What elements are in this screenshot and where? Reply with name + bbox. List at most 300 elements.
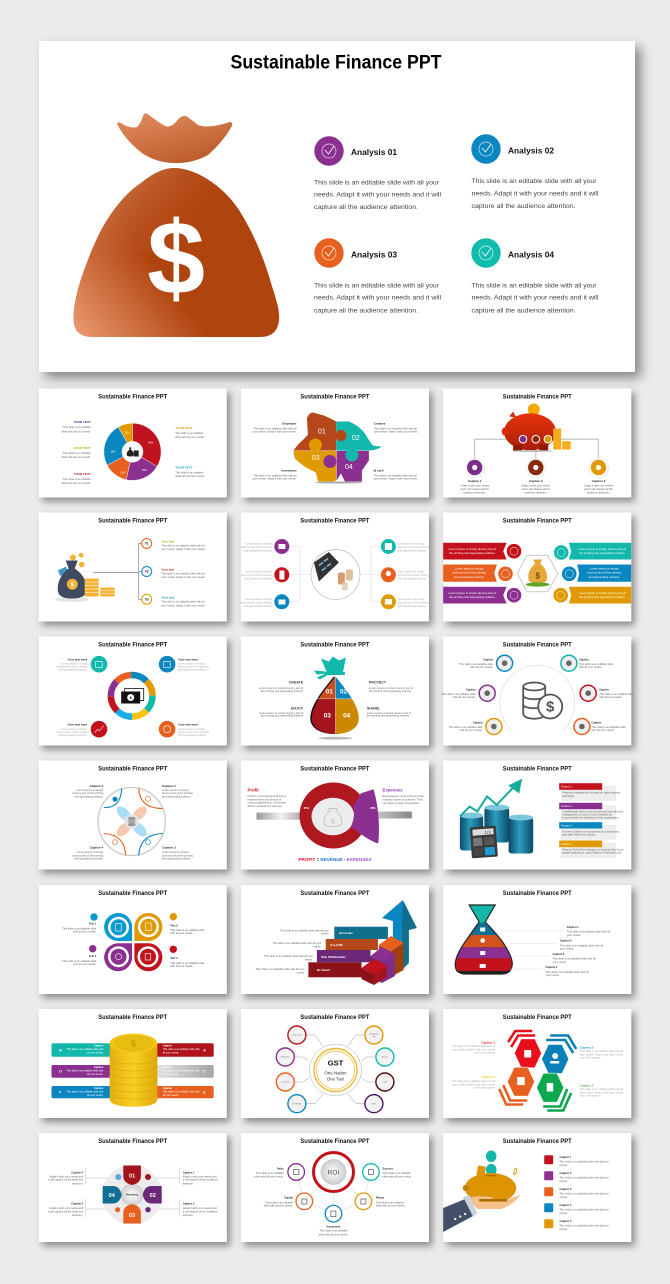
profit text [248, 788, 287, 808]
right banners: all your needs. [163, 1094, 179, 1097]
ring chart: 45% [304, 806, 310, 810]
text blocks: slide with all your needs. [376, 1204, 405, 1208]
left banners: all your needs. [87, 1052, 104, 1054]
caption text: This slide is an editable slide with all [452, 1079, 495, 1083]
left banners: This slide is an editable slide with [66, 1048, 104, 1051]
text blocks: This slide is an editable slide [579, 662, 614, 666]
captions: Caption 2 [183, 1202, 195, 1206]
profit text: Profit [247, 788, 259, 792]
finance cards: Finance 4 [561, 843, 572, 846]
satellite circles: CST [383, 1082, 388, 1084]
icon: coins [486, 1150, 496, 1176]
step bars [308, 927, 388, 977]
item 02: Your text [161, 568, 174, 572]
text blocks: Caption 2 [162, 784, 176, 788]
right text: Lorem Ipsum is simply [398, 570, 425, 574]
satellite circles [276, 1026, 394, 1113]
finance cards: It's been confined to incorporate by a secondary [562, 830, 620, 834]
item 01: 01 [145, 542, 149, 546]
finance cards: to accomplish the objectives of the organization. [562, 816, 620, 820]
step bars: Use ATM [330, 943, 343, 947]
text blocks: slide with all your needs. [61, 481, 91, 485]
item 02: This slide is an editable slide with all [161, 572, 205, 576]
icon: red pig [502, 404, 571, 452]
caption text: Caption 3 [580, 1083, 594, 1087]
captions: it will capture all the audience [183, 1178, 218, 1182]
text blocks: slide with all your needs. [175, 435, 205, 439]
captions: it will capture all the audience [48, 1178, 84, 1182]
text blocks: Caption 4 [90, 846, 104, 850]
banner text: dummy text of the printing [453, 571, 486, 575]
text blocks: Caption 3 [162, 846, 176, 850]
finance cards: growth projections, stock balance, Profit and Loss. [562, 850, 622, 854]
chart: cylinders [460, 804, 533, 854]
analysis 03 [314, 238, 441, 314]
analysis 01: needs. Adapt it with your needs and it will [314, 192, 441, 199]
central photo [311, 550, 360, 600]
icon: navy bag and coins [55, 553, 115, 602]
left text: needs. [313, 944, 322, 948]
caption text: your needs. Adapt it with your needs [580, 1052, 624, 1056]
analysis 01 [314, 136, 441, 211]
captions: CREATE [289, 680, 304, 684]
text blocks: Caption [483, 658, 493, 662]
right text: and typesetting industry [398, 548, 427, 552]
profit text: activity exceeds the expense. [247, 804, 283, 808]
caption 3: Adapt it with your needs [584, 484, 613, 488]
banner icons [498, 543, 577, 603]
item 03: your needs. Adapt it with your needs. [161, 604, 206, 608]
text blocks: Return [376, 1196, 385, 1200]
outer icons [479, 655, 596, 734]
main slide card [39, 41, 635, 372]
item 01: Your text [161, 540, 174, 544]
panel: slide 13 four teardrops [39, 885, 227, 994]
text blocks: Caption [579, 658, 589, 662]
centre hexagon bag [517, 555, 558, 592]
text blocks: slide with all your needs. [264, 1204, 293, 1208]
heading: Sustainable Finance PPT [503, 891, 572, 897]
panel: slide 3 red piggy bank [443, 388, 631, 498]
text blocks: dummy text of the printing [162, 854, 193, 858]
right text: dummy text of the printing [398, 545, 429, 549]
text blocks: slide with all your needs. [61, 430, 91, 434]
captions [259, 680, 414, 718]
analysis 04 [471, 238, 598, 314]
caption text: Caption 1 [481, 1040, 495, 1044]
caption text: your needs. Adapt it with your needs [452, 1047, 496, 1051]
panel: slide 9 coins and arc [441, 636, 634, 746]
captions: your needs. [553, 960, 567, 964]
caption 3: audience attention. [587, 490, 610, 494]
heading: Sustainable Finance PPT [98, 767, 168, 773]
left text: and typesetting industry [244, 548, 273, 552]
left banners: F [59, 1090, 62, 1094]
gray bars [256, 812, 412, 820]
captions [546, 925, 610, 977]
icon: quadrant bag: 04 [343, 712, 351, 720]
finance cards: management of cash in such a fashion as [562, 812, 612, 816]
left banners: Caption [94, 1066, 104, 1069]
text blocks: dummy text of the printing [56, 664, 88, 668]
captions: ENJOY [291, 706, 304, 710]
left banners: all your needs. [87, 1094, 104, 1097]
captions: your needs. Adapt it with your needs. [374, 476, 418, 480]
banner text: dummy text of the printing [588, 571, 621, 575]
caption 3 [584, 458, 613, 494]
text blocks: This slide is an editable [175, 470, 204, 474]
list items: This slide is an editable slide with all your [560, 1160, 609, 1164]
banner text: Lorem Ipsum is simply dummy text of [448, 547, 496, 551]
expenses text: Expenses [382, 788, 403, 792]
caption 1: and it will capture all the [460, 487, 490, 491]
banner text [448, 547, 626, 599]
profit text: realized when the amount of [247, 798, 282, 802]
captions: Adapt it with your needs and [49, 1206, 84, 1210]
list items: needs. [560, 1227, 568, 1231]
captions: PROTECT [369, 680, 387, 684]
connector lines [295, 1035, 375, 1104]
ring chart [108, 672, 156, 720]
connector lines [296, 1172, 371, 1214]
captions: Caption 1 [567, 925, 579, 929]
text blocks: slide with all your needs. [382, 1174, 412, 1178]
caption text: your needs. Adapt it with your needs [580, 1090, 624, 1094]
captions: This slide is an editable slide with all [374, 474, 417, 478]
donut chart: 30% [110, 450, 116, 454]
puzzle pig [293, 412, 382, 482]
finance cards [559, 783, 624, 858]
banner text: Lorem Ipsum is simply dummy text of [448, 591, 496, 595]
formula: PROFIT = REVENUE - EXPENSES [298, 857, 372, 862]
text blocks: and typesetting industry. [178, 668, 207, 672]
text blocks: with all your needs. [73, 962, 97, 966]
caption 1: audience attention. [463, 490, 486, 494]
captions: your needs. [567, 933, 581, 937]
wheel: 01 [129, 1174, 135, 1180]
text blocks: Sales [277, 1166, 284, 1170]
panel: slide 5 calculator hub [241, 512, 429, 622]
caption 3: and it will capture all the [584, 487, 613, 491]
ring chart: 35% [370, 806, 376, 810]
panel: slide 4 money bag and list [39, 512, 227, 622]
left text: needs. [305, 957, 313, 961]
text blocks: slide with all your needs. [254, 1174, 284, 1178]
panel: slide 20 ROI hub [241, 1133, 429, 1242]
right banners: Caption [163, 1044, 172, 1048]
panel: slide 18 hexagons [443, 1009, 631, 1118]
text blocks: with all your needs. [470, 665, 493, 669]
text blocks [61, 420, 205, 485]
heading: Sustainable Finance PPT [503, 1139, 572, 1145]
expenses text: ordinary course of business. They [382, 798, 423, 802]
left icons [274, 539, 289, 609]
captions: the printing and typesetting industry [261, 689, 304, 693]
left banners [52, 1043, 112, 1098]
captions: Caption 3 [553, 952, 565, 956]
connector lines [99, 664, 167, 729]
text blocks: This slide is an editable slide [170, 928, 205, 932]
puzzle numbers: 03 [312, 455, 320, 462]
main title: Sustainable Finance PPT [230, 52, 442, 74]
arc [500, 665, 575, 731]
text blocks: This slide is an editable [175, 431, 204, 435]
centre hexagon bag: $ [535, 572, 540, 580]
analysis 03: capture all the audience attention. [314, 307, 418, 314]
icon: quadrant bag: 02 [340, 688, 348, 696]
arrow [460, 779, 522, 816]
left text: needs. [297, 970, 305, 974]
left text: dummy text of the printing [241, 600, 272, 604]
captions: it will capture all the audience [183, 1209, 218, 1213]
coin stack [110, 1034, 157, 1107]
text blocks: This slide is an editable [63, 451, 91, 455]
text blocks: with all your needs. [459, 728, 483, 732]
step bars: Be Smart [317, 968, 330, 972]
banner text: the printing and typesetting industry. [449, 595, 496, 599]
caption text [452, 1040, 624, 1097]
right banners: all your needs. [163, 1073, 179, 1076]
finance cards: specialist within the venture. [562, 832, 596, 836]
text blocks: Caption [473, 720, 483, 724]
panel: slide 17 GST hub [241, 1009, 429, 1118]
item 01: your needs. Adapt it with your needs. [161, 547, 206, 551]
left text: This slide is an editable slide with all your [272, 941, 321, 945]
list items: needs. [560, 1195, 568, 1199]
puzzle numbers: 04 [345, 464, 353, 471]
panel: slide 10 circular flower [39, 760, 227, 870]
text blocks: Caption [466, 688, 476, 692]
wheel [102, 1165, 162, 1224]
captions: Caption 4 [71, 1170, 84, 1174]
satellite circles: Tax [372, 1036, 375, 1038]
text blocks: dummy text of the printing [178, 730, 209, 734]
ROI circle [314, 1152, 354, 1192]
finance cards: It additionally refers to the economical and effective [562, 810, 624, 814]
panel: slide 19 heading wheel [39, 1133, 227, 1242]
text blocks [62, 922, 205, 968]
text blocks: Success [382, 1166, 394, 1170]
pig shadow [315, 482, 363, 484]
list items: needs. [560, 1179, 568, 1183]
icon: calculator [470, 826, 498, 858]
captions: Caption 3 [71, 1202, 84, 1206]
captions: SHARE [367, 706, 380, 710]
text blocks: This slide is an editable slide [459, 662, 493, 666]
icon: coins with dollar [523, 682, 562, 719]
wheel: Heading [126, 1193, 138, 1197]
captions: This slide is an editable slide with all [546, 970, 589, 974]
text blocks: and typesetting industry. [74, 857, 104, 861]
satellite circles: GST/TDS [293, 1103, 302, 1105]
right banners: E [203, 1090, 206, 1094]
item 03: 03 [145, 597, 149, 601]
expenses text: Expenses are costs incurred in the [382, 794, 424, 798]
text blocks: YOUR TEXT [74, 472, 91, 476]
text blocks: with all your needs. [599, 695, 622, 699]
text blocks: Lorem Ipsum is simply [77, 788, 104, 792]
right banners [155, 1043, 214, 1098]
captions: attention. [72, 1213, 83, 1217]
left banners: B [59, 1048, 62, 1052]
left text: and typesetting industry [244, 604, 273, 608]
text blocks: Caption [592, 720, 602, 724]
heading: Sustainable Finance PPT [300, 1015, 370, 1021]
analysis 02: Analysis 02 [508, 146, 554, 156]
list items: needs. [560, 1163, 568, 1167]
satellite circles: Sovereign [369, 1034, 378, 1036]
text blocks [56, 658, 209, 737]
text blocks: with all your needs. [592, 728, 615, 732]
text blocks: This slide is an editable [265, 1200, 293, 1204]
expenses text [382, 788, 424, 805]
text blocks: and typesetting industry. [58, 668, 88, 672]
echo stripes [499, 1031, 576, 1110]
right text: dummy text of the printing [398, 600, 429, 604]
heading: Sustainable Finance PPT [98, 1139, 168, 1145]
right banners: This slide is an editable slide with [163, 1090, 200, 1094]
icon: navy bag and coins: $ [71, 582, 75, 588]
left text: This slide is an editable slide with all your [264, 954, 313, 958]
caption text: Caption 2 [580, 1045, 594, 1049]
text blocks: This slide is an editable slide [599, 692, 634, 696]
right text: Lorem Ipsum is simply [398, 597, 425, 601]
left text [256, 928, 329, 974]
hexagons [507, 1039, 569, 1102]
right text: and typesetting industry [398, 576, 427, 580]
text blocks: with all your needs. [452, 695, 476, 699]
text blocks: dummy text of the printing [56, 730, 88, 734]
text blocks: Text 1 [89, 922, 97, 926]
analysis 03: This slide is an editable slide with all your [314, 282, 439, 289]
banner text: Lorem Ipsum is simply dummy text of [578, 547, 626, 551]
panel: slide 12 cylinders and calculator [443, 760, 631, 870]
captions: your needs. [546, 973, 560, 977]
caption 2 [521, 458, 551, 494]
captions: your needs. [560, 947, 574, 951]
text blocks: with all your needs. [170, 931, 193, 935]
captions: attention. [72, 1181, 83, 1185]
captions: This slide is an editable slide with all [253, 474, 297, 478]
heading: Sustainable Finance PPT [98, 891, 168, 897]
right banners: This slide is an editable slide with [163, 1048, 200, 1051]
right text: dummy text of the printing [398, 573, 429, 577]
captions: Lorem Ipsum is simply dummy text of [367, 711, 412, 715]
text blocks: with all your needs. [579, 665, 602, 669]
heading: Sustainable Finance PPT [503, 519, 572, 525]
GST centre [310, 1044, 362, 1096]
left banners: Caption [94, 1087, 104, 1090]
right banners [569, 543, 631, 604]
item 02 [142, 566, 206, 579]
step bars: Set Goals [339, 931, 353, 935]
donut chart: 10% [124, 432, 130, 434]
icon: quadrant bag: 03 [324, 712, 331, 720]
text blocks: Lorem Ipsum is simply [162, 788, 189, 792]
caption text: This slide is an editable slide with all [580, 1049, 623, 1053]
coin stack: $ [131, 1038, 136, 1048]
text blocks: This slide is an editable slide [448, 725, 483, 729]
captions: Creative [374, 422, 386, 426]
captions: Employee [282, 422, 297, 426]
captions: This slide is an editable slide with all [374, 426, 417, 430]
caption text: This slide is an editable slide with all [580, 1087, 623, 1091]
left text: dummy text of the printing [241, 573, 272, 577]
heading: Sustainable Finance PPT [98, 395, 168, 401]
captions: This slide is an editable slide with all [553, 957, 596, 961]
list items: Caption 5 [560, 1219, 572, 1223]
left banners: This slide is an editable slide with [66, 1070, 104, 1072]
puzzle numbers [312, 428, 360, 471]
ROI circle: ROI [328, 1170, 339, 1176]
caption 2: audience attention. [524, 490, 547, 494]
text blocks: dummy text of the printing [72, 854, 104, 858]
list items: needs. [560, 1211, 568, 1215]
captions: Innovation [281, 468, 297, 472]
icon: banknotes: $ [130, 695, 133, 700]
captions: it will capture all the audience [48, 1209, 84, 1213]
list items: This slide is an editable slide with all your [560, 1176, 609, 1180]
icon: quadrant bag [310, 656, 360, 740]
profit text: Profit is a financial benefit that is [247, 794, 287, 798]
text blocks: This slide is an editable slide [441, 692, 476, 696]
caption 2: Adapt it with your needs [521, 484, 551, 488]
list items: Caption 1 [560, 1155, 572, 1159]
captions: attention. [183, 1213, 194, 1217]
captions: Caption 2 [560, 939, 572, 943]
right banners: This slide is an editable slide with [163, 1070, 200, 1072]
right banners: Caption [163, 1066, 172, 1069]
analysis 02 [471, 134, 598, 210]
satellite circles: IGST [372, 1103, 377, 1105]
wheel: 03 [129, 1213, 135, 1219]
left text: This slide is an editable slide with all your [256, 967, 305, 971]
text blocks: YOUR TEXT [74, 446, 91, 450]
text blocks: YOUR TEXT [175, 466, 193, 470]
caption 1 [460, 458, 490, 494]
donut chart [104, 423, 161, 480]
GST centre: One Tax! [327, 1076, 344, 1082]
caption text: Caption 4 [481, 1075, 495, 1079]
text blocks: and typesetting industry. [162, 794, 191, 798]
text blocks: Capital [284, 1196, 293, 1200]
left banners [443, 543, 507, 604]
heading: Sustainable Finance PPT [503, 395, 572, 401]
right banners: A [203, 1048, 206, 1052]
profit text: revenue gained from a business [247, 801, 286, 805]
list items: Caption 3 [560, 1187, 572, 1191]
banner text: Lorem Ipsum is simply dummy text of [578, 591, 626, 595]
panel: slide 6 banners and hexagon [443, 512, 631, 622]
left banners: This slide is an editable slide with [66, 1090, 104, 1094]
captions: attention. [183, 1181, 194, 1185]
text blocks: Lorem Ipsum is simply [61, 727, 88, 731]
captions: Caption 1 [183, 1170, 195, 1174]
text blocks: This slide is an editable [382, 1171, 411, 1175]
text blocks: dummy text of the printing [72, 791, 104, 795]
hexagon icons [517, 1050, 559, 1092]
text blocks: with all your needs. [73, 930, 97, 934]
text blocks: Caption 1 [90, 784, 104, 788]
list items: Caption 4 [560, 1203, 572, 1207]
icon: quadrant bag: 01 [326, 688, 333, 696]
text blocks: and typesetting industry. [162, 857, 191, 861]
icon: calculator: 123 [484, 829, 492, 835]
GST centre: GST [328, 1058, 344, 1068]
captions: your needs. Adapt it with your needs. [374, 430, 418, 434]
item 02: your needs. Adapt it with your needs. [161, 575, 206, 579]
text blocks: Lorem Ipsum is simply [77, 850, 104, 854]
